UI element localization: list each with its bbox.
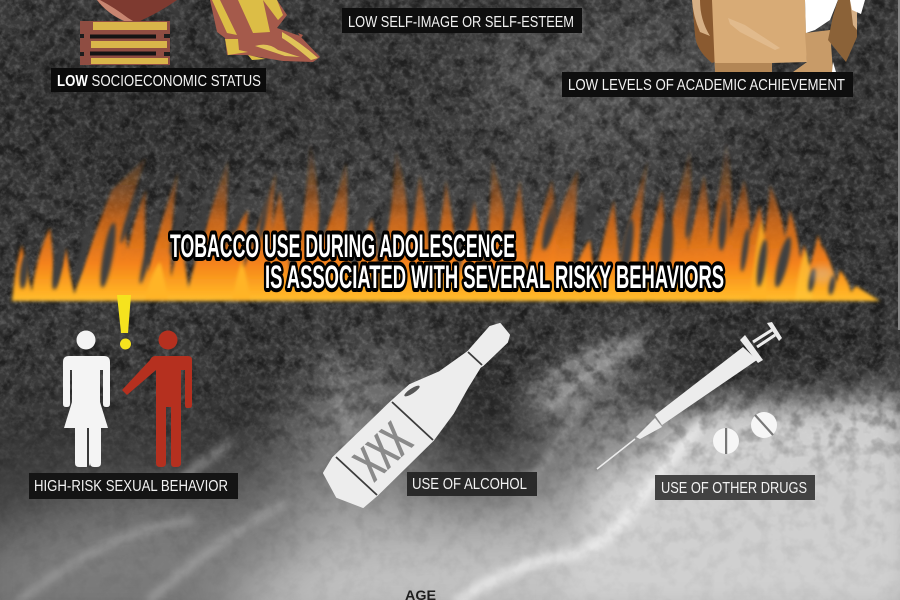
dark gaps between flame tongues	[18, 175, 837, 295]
label: use of other drugs: USE OF OTHER DRUGS	[661, 480, 807, 497]
icon: red man figure	[122, 330, 192, 467]
label: use of alcohol	[407, 472, 537, 496]
label: high-risk sexual behavior: HIGH-RISK SEXUAL BEHAVIOR	[34, 478, 228, 495]
title: TOBACCO USE DURING ADOLESCENCE	[170, 228, 515, 264]
icon: pills	[713, 412, 777, 454]
icon: syringe	[597, 322, 782, 469]
label: low socioeconomic status	[51, 68, 266, 92]
label: use of alcohol: USE OF ALCOHOL	[412, 476, 527, 493]
label: low levels of academic achievement: LOW LEVELS OF ACADEMIC ACHIEVEMENT	[568, 77, 845, 94]
icon: XXX alcohol bottle	[324, 324, 509, 507]
flames	[10, 140, 880, 301]
icon: crate and maroon bowl	[80, 0, 177, 65]
icon: XXX alcohol bottle: XXX	[343, 412, 422, 491]
icon: striped trousers and shoe	[210, 0, 320, 62]
icon: student holding paper	[692, 0, 865, 72]
label: use of other drugs	[655, 475, 815, 500]
smoke: rising grey smoke	[0, 310, 900, 600]
smoke wisp over flame tail	[810, 266, 834, 282]
label: low self-image or self-esteem: LOW SELF-IMAGE OR SELF-ESTEEM	[348, 14, 574, 31]
title	[170, 228, 724, 295]
label: low self-image or self-esteem	[342, 8, 582, 33]
label: high-risk sexual behavior	[29, 473, 238, 499]
label: low levels of academic achievement	[562, 72, 853, 97]
label: low socioeconomic status: LOW SOCIOECONOMIC STATUS	[57, 73, 261, 90]
icon: white woman figure	[63, 330, 110, 467]
icon: yellow exclamation mark	[117, 295, 131, 350]
